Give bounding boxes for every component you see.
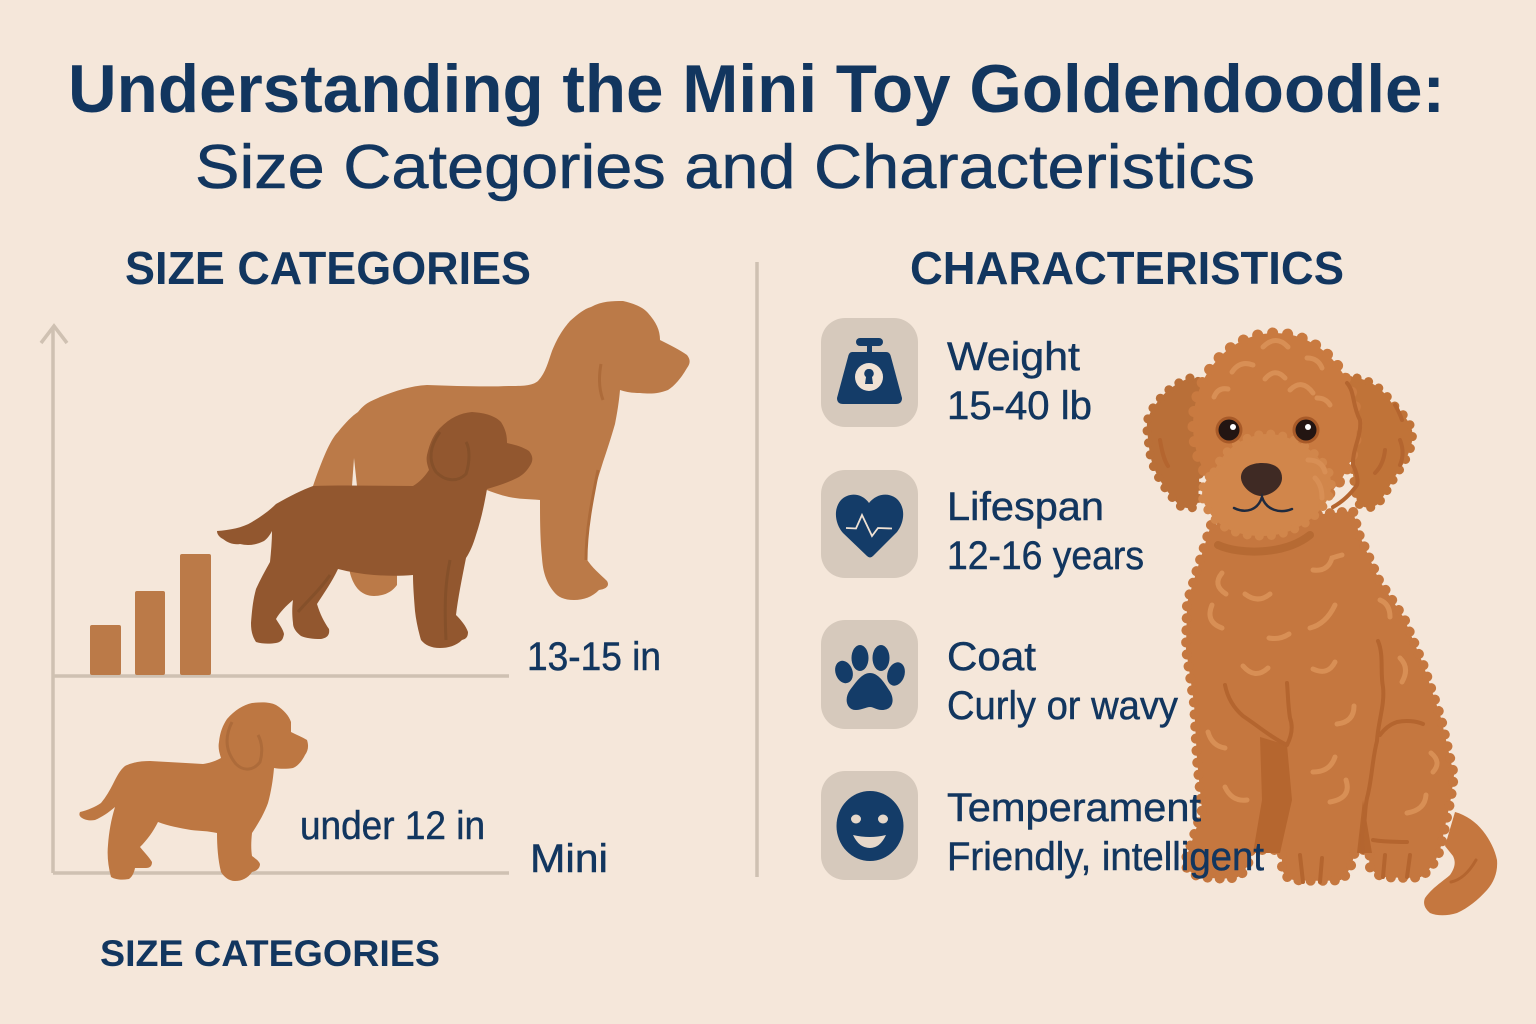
medium dog silhouette	[217, 412, 532, 648]
body	[1184, 511, 1454, 881]
title	[68, 51, 1445, 202]
icon: smiling face	[821, 771, 918, 880]
label: 13-15 in: 13-15 in	[527, 635, 661, 679]
characteristic: temperament	[947, 786, 1264, 879]
characteristic: weight: Weight	[947, 335, 1080, 379]
title: Size Categories and Characteristics	[195, 133, 1255, 202]
characteristic: lifespan: 12-16 years	[947, 534, 1144, 578]
characteristic: lifespan	[947, 485, 1144, 578]
title: Understanding the Mini Toy Goldendoodle:	[68, 51, 1445, 127]
divider	[755, 262, 759, 877]
characteristic: coat: Curly or wavy	[947, 684, 1178, 728]
left ear	[1147, 378, 1204, 508]
coat curls	[1208, 340, 1437, 813]
head	[1193, 333, 1357, 517]
bar chart	[90, 554, 211, 675]
heading: size categories: SIZE CATEGORIES	[125, 242, 531, 294]
small dog silhouette	[79, 702, 308, 881]
characteristic: weight	[947, 335, 1092, 428]
heading: characteristics: CHARACTERISTICS	[910, 242, 1344, 294]
mouth	[1234, 497, 1292, 511]
large dog silhouette	[313, 301, 690, 600]
eyes	[1216, 416, 1320, 444]
characteristic: temperament: Temperament	[947, 786, 1201, 830]
chart axes	[41, 326, 509, 873]
head and ear dark lines	[1160, 383, 1403, 552]
illustration: sitting goldendoodle	[1147, 333, 1497, 915]
coat fold lines	[1225, 641, 1476, 882]
icon: paw print	[821, 620, 918, 729]
label: mini: Mini	[530, 837, 608, 881]
nose	[1241, 463, 1282, 496]
tail	[1424, 812, 1497, 915]
characteristic: temperament: Friendly, intelligent	[947, 835, 1264, 879]
characteristic: coat: Coat	[947, 635, 1036, 679]
characteristic: weight: 15-40 lb	[947, 384, 1092, 428]
icon: heart with pulse	[821, 470, 918, 578]
characteristic: lifespan: Lifespan	[947, 485, 1104, 529]
characteristic: coat	[947, 635, 1178, 728]
right ear	[1340, 378, 1412, 508]
label: under 12 in: under 12 in	[300, 804, 485, 848]
muzzle	[1202, 434, 1331, 536]
shadow between the legs	[1253, 737, 1292, 853]
caption: size categories: SIZE CATEGORIES	[100, 933, 440, 974]
icon: weight scale	[821, 318, 918, 427]
